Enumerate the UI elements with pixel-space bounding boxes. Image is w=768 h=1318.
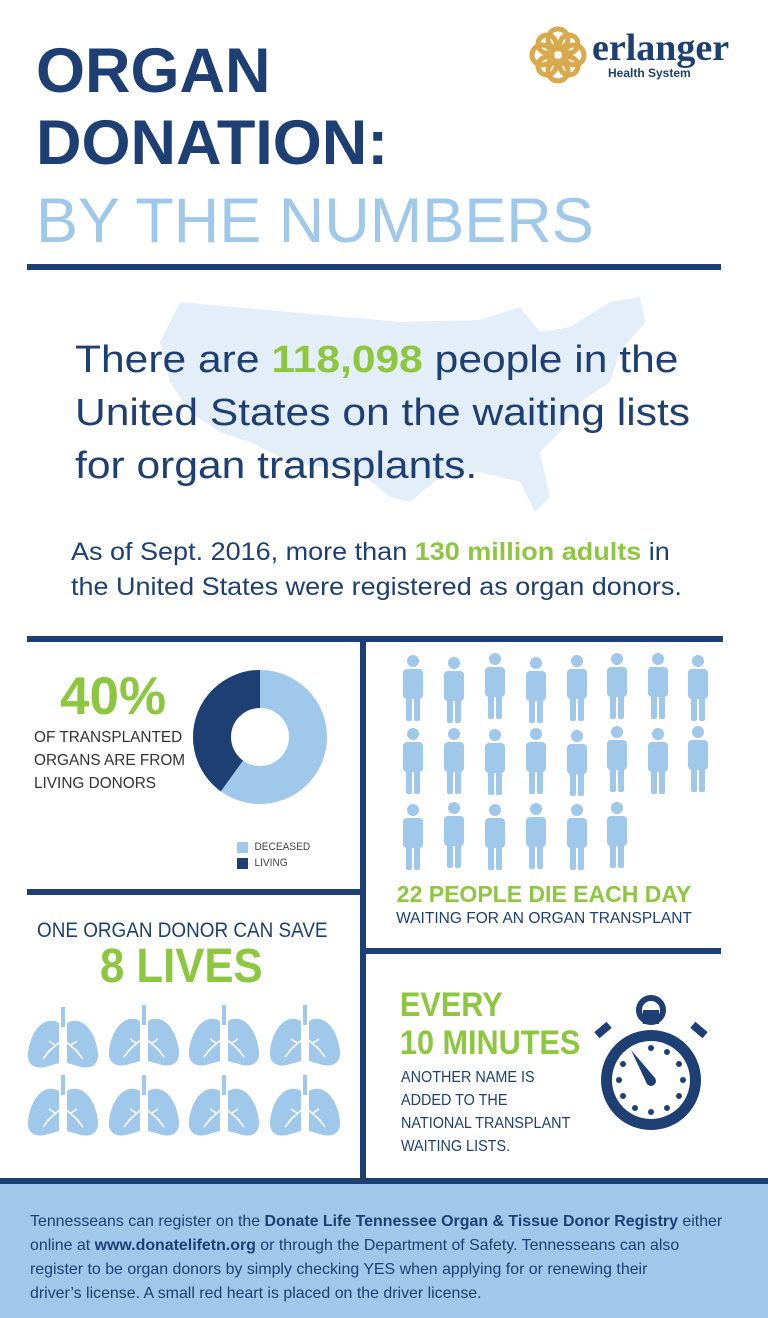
title: DONATION: bbox=[36, 108, 388, 178]
heading bbox=[400, 986, 580, 1062]
description bbox=[401, 1069, 570, 1155]
description: NATIONAL TRANSPLANT bbox=[401, 1115, 570, 1132]
panel: living donors bbox=[34, 667, 327, 869]
footer text: Tennesseans can register on the Donate Life Tennessee Organ & Tissue Donor Registry either bbox=[30, 1213, 722, 1230]
main statement: for organ transplants. bbox=[75, 445, 477, 487]
description: ORGANS ARE FROM bbox=[34, 752, 185, 769]
panel: 22 people bbox=[396, 653, 708, 927]
lungs icons bbox=[28, 1005, 340, 1136]
legend: DECEASED bbox=[254, 841, 310, 853]
22 people text: 22 PEOPLE DIE EACH DAY bbox=[397, 881, 691, 907]
main statement: United States on the waiting lists bbox=[75, 392, 690, 434]
40% heading: 40% bbox=[60, 667, 166, 726]
icon: stopwatch bbox=[594, 995, 708, 1130]
legend bbox=[237, 841, 310, 869]
description: ADDED TO THE bbox=[401, 1092, 507, 1109]
logo: Health System bbox=[608, 66, 691, 80]
22 people text bbox=[396, 881, 692, 927]
grid lines bbox=[27, 636, 723, 642]
logo bbox=[530, 26, 729, 84]
sub statement bbox=[71, 538, 682, 601]
title: ORGAN bbox=[36, 36, 270, 106]
sub statement: As of Sept. 2016, more than 130 million adults in bbox=[71, 538, 670, 566]
footer band bbox=[0, 1178, 768, 1318]
main statement bbox=[75, 339, 690, 487]
title bbox=[36, 36, 594, 256]
panel: every 10 minutes bbox=[400, 986, 708, 1155]
legend: LIVING bbox=[254, 857, 288, 869]
footer text: online at www.donatelifetn.org or through the Department of Safety. Tennesseans can also bbox=[30, 1237, 679, 1254]
donut chart bbox=[193, 670, 327, 804]
description: ANOTHER NAME IS bbox=[401, 1069, 535, 1086]
map backdrop bbox=[160, 297, 645, 512]
description: OF TRANSPLANTED bbox=[34, 729, 182, 746]
logo: erlanger bbox=[592, 27, 729, 69]
footer text bbox=[30, 1213, 722, 1302]
description: LIVING DONORS bbox=[34, 775, 156, 792]
description bbox=[34, 729, 185, 792]
footer text: register to be organ donors by simply checking YES when applying for or renewing their bbox=[30, 1261, 647, 1278]
panel: 8 lives bbox=[28, 919, 340, 1136]
panel: 8 lives: 8 LIVES bbox=[100, 940, 263, 993]
heading: 10 MINUTES bbox=[400, 1024, 580, 1062]
title: BY THE NUMBERS bbox=[36, 186, 594, 256]
sub statement: the United States were registered as organ donors. bbox=[71, 573, 682, 601]
22 people text: WAITING FOR AN ORGAN TRANSPLANT bbox=[396, 910, 692, 927]
description: WAITING LISTS. bbox=[401, 1138, 510, 1155]
title divider bbox=[27, 264, 721, 270]
main statement: There are 118,098 people in the bbox=[75, 339, 678, 381]
people icons bbox=[403, 653, 708, 870]
heading: ONE ORGAN DONOR CAN SAVE bbox=[37, 919, 328, 942]
heading: EVERY bbox=[400, 986, 503, 1024]
footer text: driver’s license. A small red heart is placed on the driver license. bbox=[30, 1285, 482, 1302]
